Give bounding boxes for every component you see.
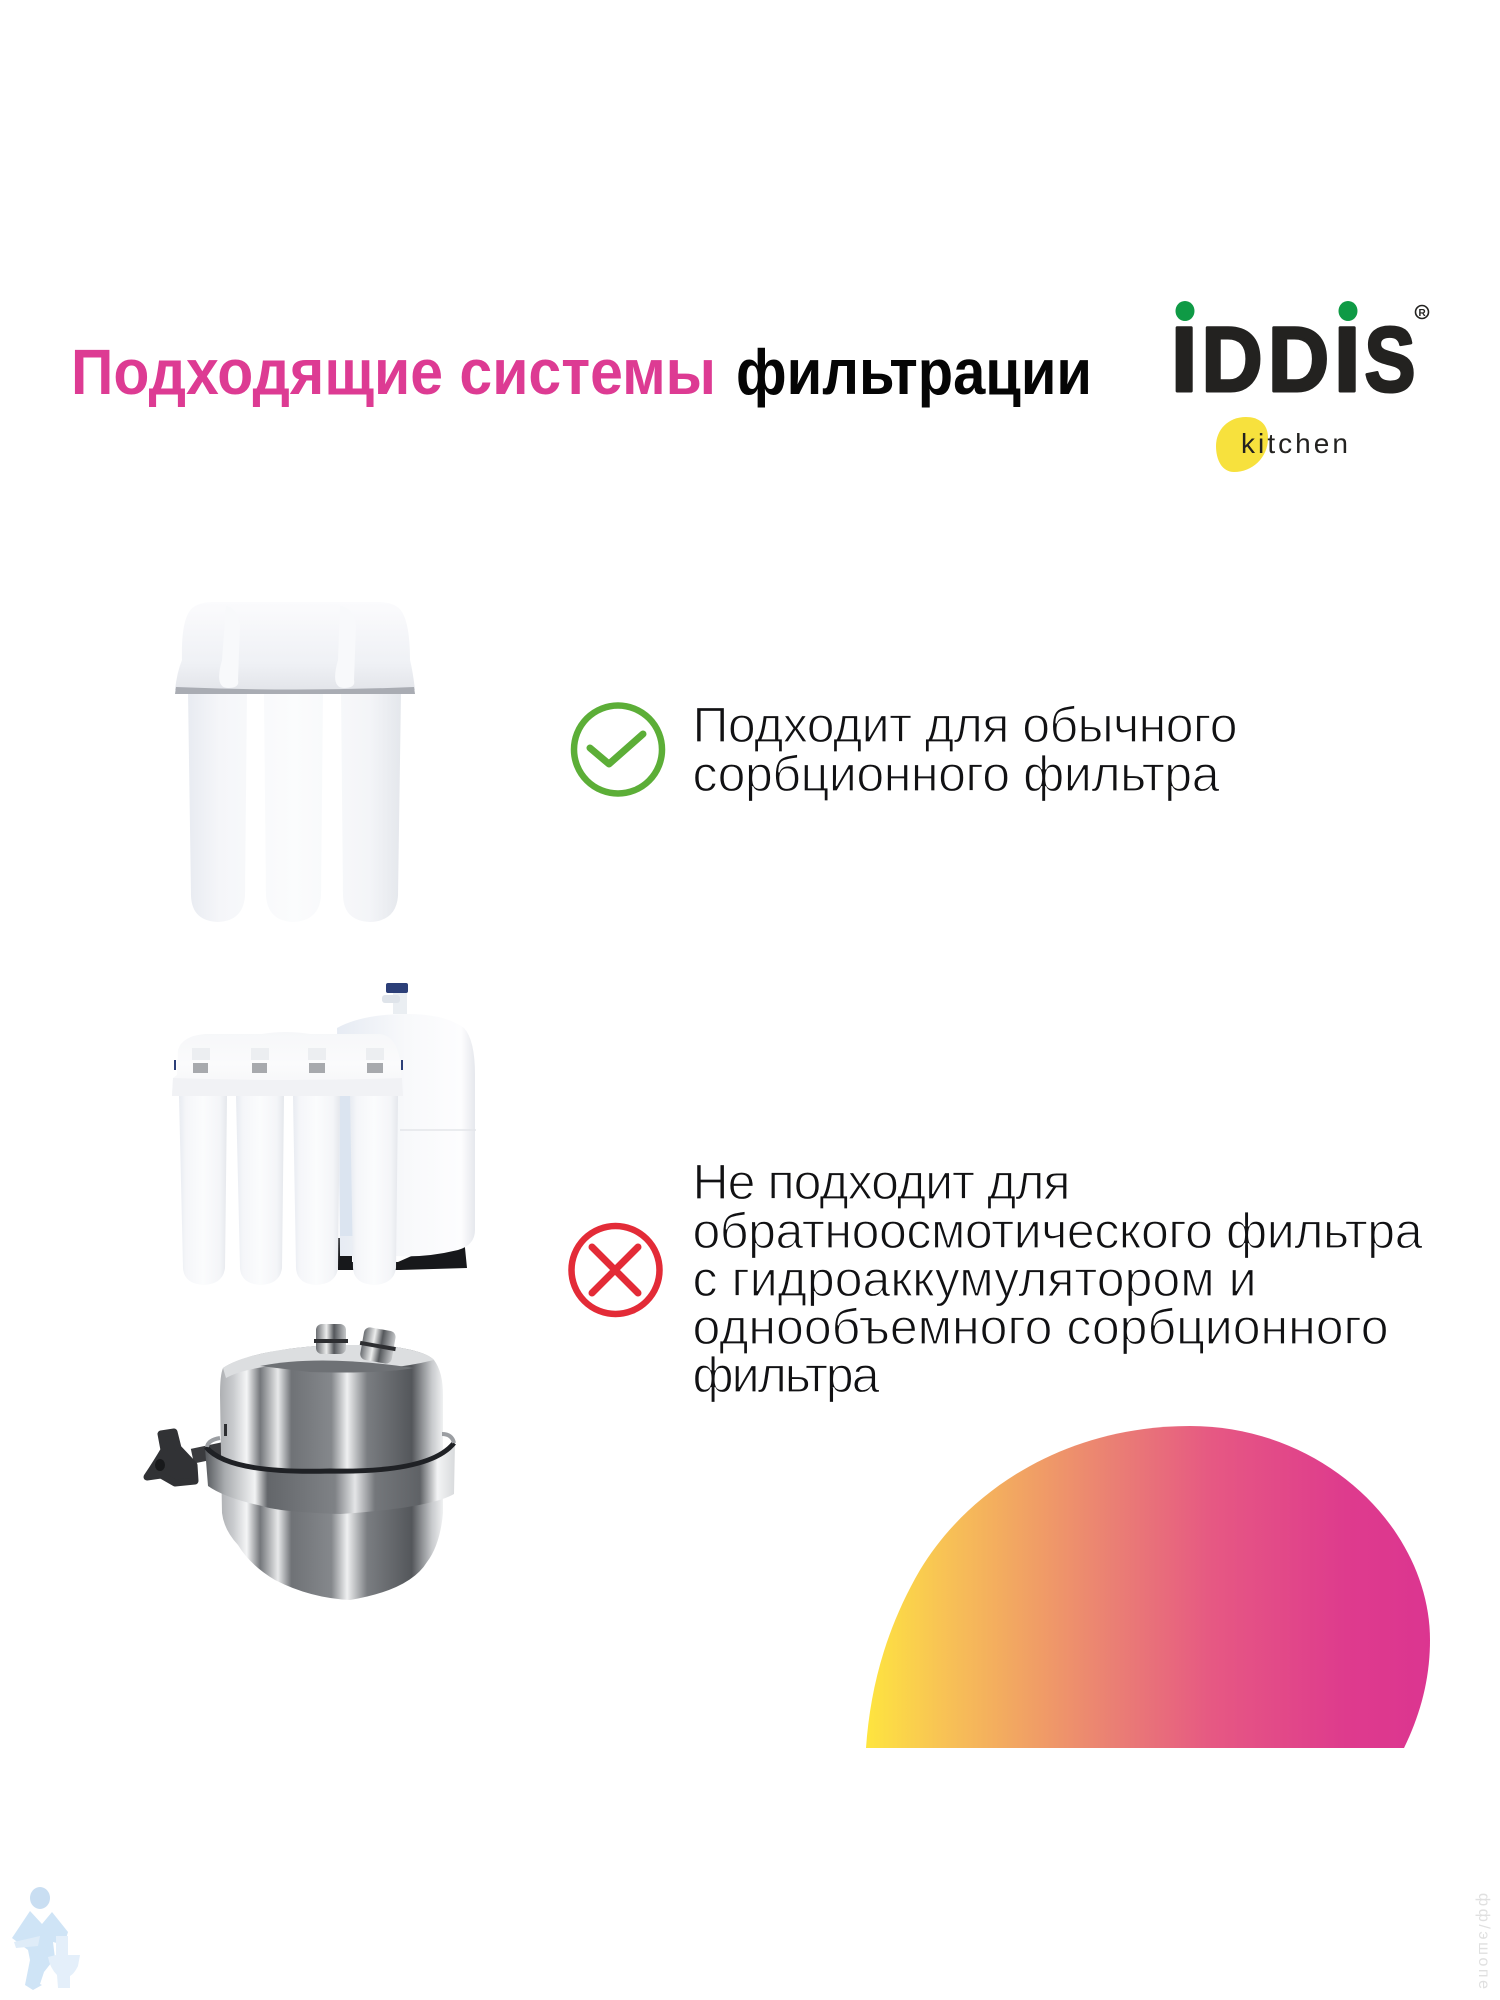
- text: suitable: Подходит для обычного: [692, 697, 1238, 753]
- text: not suitable: Не подходит для: [692, 1154, 1070, 1210]
- watermark: vertical text: фф/эшопе: [1475, 1893, 1492, 1989]
- text: not suitable: фильтра: [692, 1347, 880, 1403]
- knob: [147, 1432, 225, 1483]
- text: not suitable: однообъемного сорбционного: [692, 1299, 1388, 1355]
- watermark: plumber: [12, 1887, 80, 1990]
- logo: IDDIS kitchen: R: [1418, 308, 1426, 319]
- logo: IDDIS kitchen: D: [1268, 308, 1329, 411]
- logo: IDDIS kitchen: [1171, 301, 1428, 472]
- text: not suitable: обратноосмотического фильтра: [692, 1203, 1423, 1259]
- stand: [338, 1238, 467, 1270]
- title: [71, 336, 1092, 408]
- logo: IDDIS kitchen: S: [1365, 307, 1415, 411]
- product: three-stage sorption filter: [175, 602, 415, 922]
- title: Подходящие системы: [71, 336, 716, 408]
- logo: IDDIS kitchen: kitchen: [1241, 428, 1348, 459]
- logo: IDDIS kitchen: D: [1201, 308, 1263, 411]
- housing: [172, 1032, 403, 1096]
- gradient blob: [866, 1426, 1430, 1748]
- product: reverse osmosis filter with tank: [172, 983, 476, 1285]
- body: [220, 1345, 443, 1600]
- text: suitable: [692, 697, 1238, 802]
- text: not suitable: с гидроаккумулятором и: [692, 1251, 1256, 1307]
- valve: [382, 983, 408, 1014]
- text: not suitable: [692, 1154, 1423, 1403]
- title: фильтрации: [736, 336, 1092, 408]
- icon: red cross: [572, 1226, 660, 1314]
- nuts: [314, 1324, 399, 1365]
- logo: IDDIS kitchen: I: [1171, 308, 1198, 411]
- tank: [337, 1014, 476, 1256]
- logo: IDDIS kitchen: I: [1334, 308, 1361, 411]
- icon: green check: [574, 706, 662, 794]
- columns: [179, 1096, 227, 1285]
- clamp band: [205, 1442, 455, 1514]
- text: suitable: сорбционного фильтра: [692, 746, 1220, 802]
- product: steel single-housing filter: [147, 1324, 455, 1600]
